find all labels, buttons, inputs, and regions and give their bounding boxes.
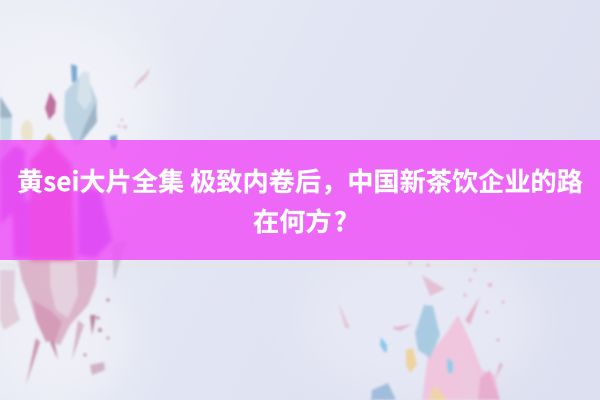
colours beneath the band, left <box>0 140 112 260</box>
title <box>17 161 583 239</box>
faint line under band <box>0 264 600 267</box>
crystals upper left <box>0 64 117 170</box>
splash lower left <box>0 240 127 385</box>
title line 1: 黄sei大片全集 极致内卷后，中国新茶饮企业的路 <box>17 161 583 199</box>
title line 2: 在何方? <box>253 201 347 239</box>
right splash <box>338 275 500 400</box>
pink title band <box>0 140 600 260</box>
splash upper left <box>118 68 149 129</box>
